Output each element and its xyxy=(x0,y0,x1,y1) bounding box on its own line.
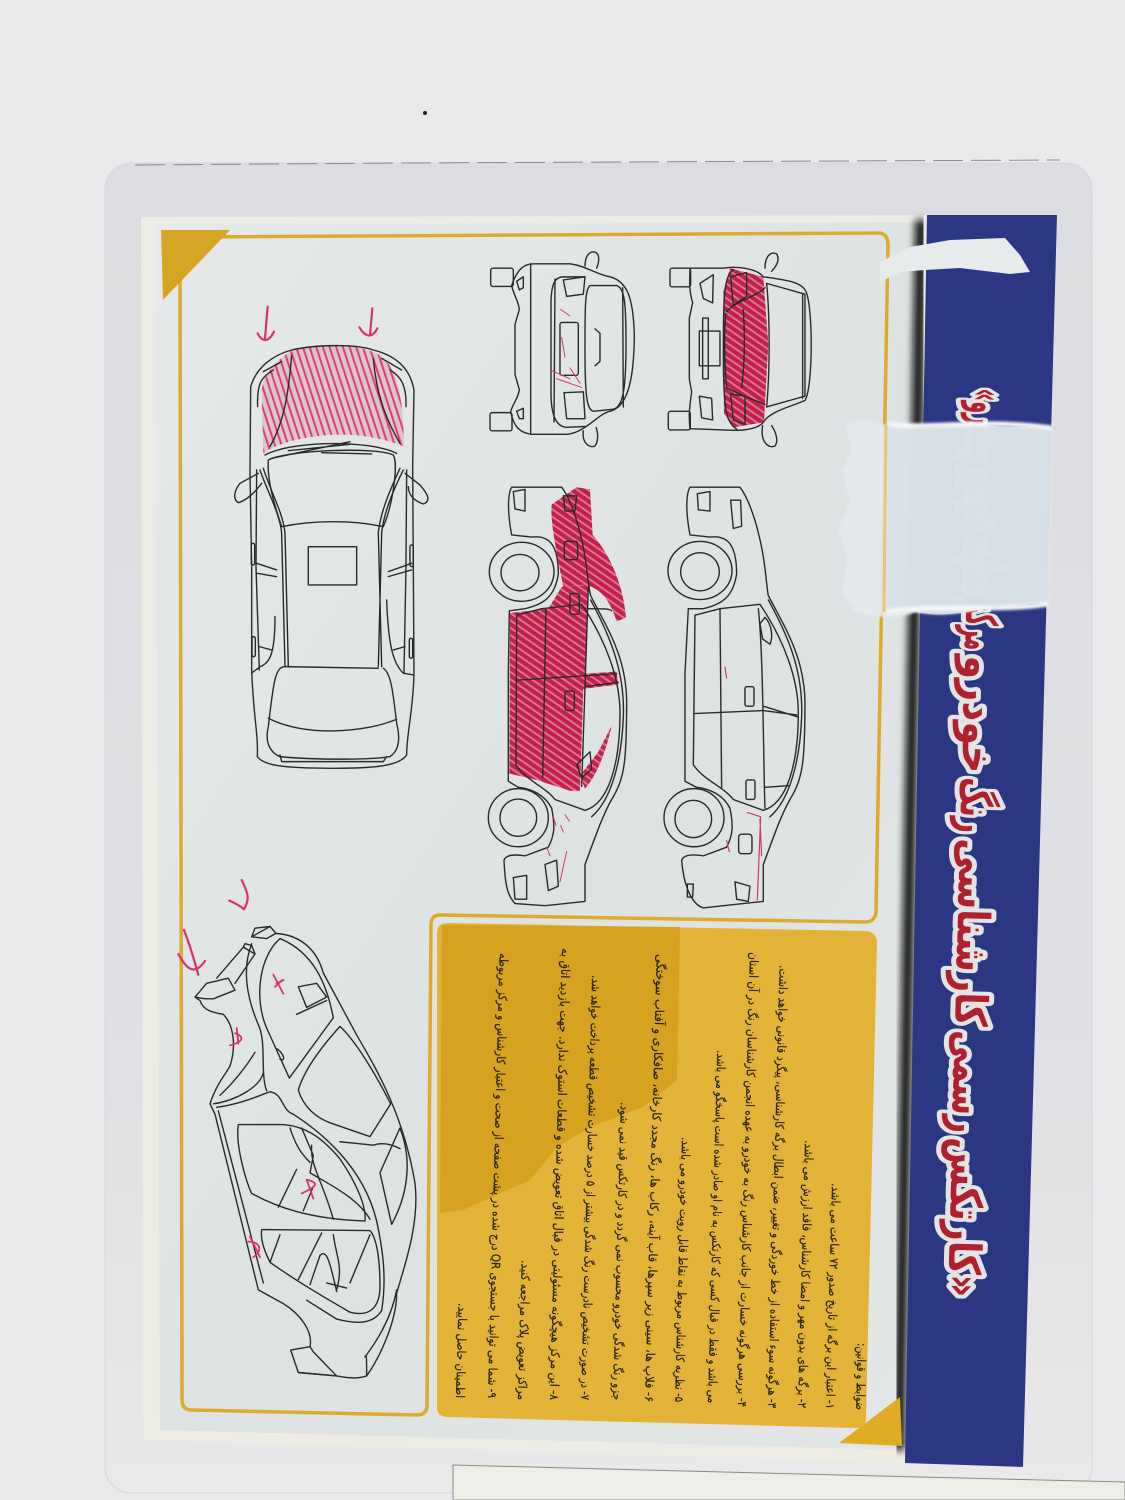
rules text lines xyxy=(453,948,843,1409)
car outline xyxy=(250,346,414,768)
heading: card title: خودرو xyxy=(951,653,1005,774)
arrow: right pink arrow xyxy=(359,308,377,336)
sleeve reflection strip xyxy=(1056,360,1076,680)
rules text lines: ۸- این مرکز هیچگونه مسئولیتی در قبال اتاق تعویض شده و قطعات استوک ندارد. جهت بازدید اتاق به xyxy=(546,948,573,1401)
rules text lines: ۷- در صورت تشخیص نادرست رنگ شدگی بیشتر از ۵ درصد خسارت تشخیص قطعه پرداخت خواهد شد. xyxy=(577,975,603,1401)
rules text lines: ۵- نظریه کارشناس مربوط به نقاط قابل رویت خودرو می باشد. xyxy=(671,1137,693,1402)
rules text lines: ۶- فلاپ ها، سینی زیر سپرها، قاب آینه، رکاب ها، رنگ مجدد کارخانه، صافکاری و آفتاب سوختگی xyxy=(641,954,669,1402)
heading: card title: مرکز معاینه خودرو پیشرو» xyxy=(954,388,1012,651)
card white field xyxy=(155,222,925,1450)
plastic sleeve xyxy=(105,163,1092,1493)
drawing: left side car with red hatching xyxy=(488,487,627,906)
arrow: pink arrow two xyxy=(229,880,248,909)
heading: card title xyxy=(937,388,1012,1298)
heading: card title: رسمی xyxy=(941,1030,995,1134)
rules text lines: ۴- بررسی هرگونه خسارت از جانب کارشناس رنگ به خودرو به عهده انجمن کارشناسان رنگ در آن استان xyxy=(734,952,762,1407)
glare: large reflection xyxy=(838,420,1052,617)
heading: card title: کارشناسی xyxy=(944,838,1000,1027)
speck on surface xyxy=(423,111,427,115)
rules text lines: ۳- هرگونه سوء استفاده از خط خوردگی و تغییر، ضمن ابطال برگه کارشناسی، پیگرد قانونی خواهد داشت. xyxy=(764,965,791,1409)
panel: rules box xyxy=(437,923,877,1428)
arrow: left pink arrow xyxy=(258,307,274,340)
drawing: top view car xyxy=(235,307,428,768)
heading: card title: «کارتکس xyxy=(937,1137,992,1298)
corner triangle top left xyxy=(161,230,230,300)
red hatched hood xyxy=(262,345,404,453)
pink marks xyxy=(230,975,315,1257)
rules text lines: می باشد و فقط در قبال کسی که کارتکس به نام او صادر شده است پاسخگو می باشد. xyxy=(704,1050,728,1403)
corner triangle bottom right xyxy=(839,1397,902,1446)
paper under sleeve xyxy=(453,1465,1125,1500)
drawing: car body shell xyxy=(178,880,416,1378)
rules text lines: مراکز تعویض پلاک مراجعه کنید. xyxy=(514,1260,533,1400)
rules heading: ضوابط و قوانین: xyxy=(852,1343,869,1410)
rules text lines: جزو رنگ شدگی خودرو محسوب نمی گردد و در کارتکس قید نمی شود. xyxy=(609,1102,632,1400)
glare: narrow reflection xyxy=(880,238,1030,282)
drawing: front view car with red hatching xyxy=(668,253,811,447)
arrow: pink arrow one xyxy=(178,930,205,975)
rules text lines: اطمینان حاصل نمایید. xyxy=(453,1303,469,1398)
rules text lines: ۹- شما می توانید با جستجوی QR درج شده در پشت صفحه از صحت و اعتبار کارشناس و مرکز مربوطه xyxy=(484,953,511,1398)
blue band shadow xyxy=(899,220,921,1450)
drawing: rear view car xyxy=(490,252,634,447)
panel: yellow framed drawing area xyxy=(180,233,888,1415)
shell pillars and ribs xyxy=(213,944,384,1322)
shell front beam xyxy=(217,926,276,983)
shell outline xyxy=(195,926,416,1378)
sleeve top edge xyxy=(135,160,1060,165)
shell openings xyxy=(260,939,333,1078)
drawing: right side car xyxy=(664,487,805,908)
panel: blue title band xyxy=(905,215,1057,1467)
rules text lines: ۲- برگه های بدون مهر و امضا کارشناس، فاقد ارزش می باشد. xyxy=(794,1140,816,1408)
printed card xyxy=(141,215,1057,1467)
heading: card title: رنگ xyxy=(949,777,1001,834)
rules text lines: ۱- اعتبار این برگه از تاریخ صدور ۷۲ ساعت می باشد. xyxy=(822,1183,843,1409)
car details xyxy=(258,355,406,447)
